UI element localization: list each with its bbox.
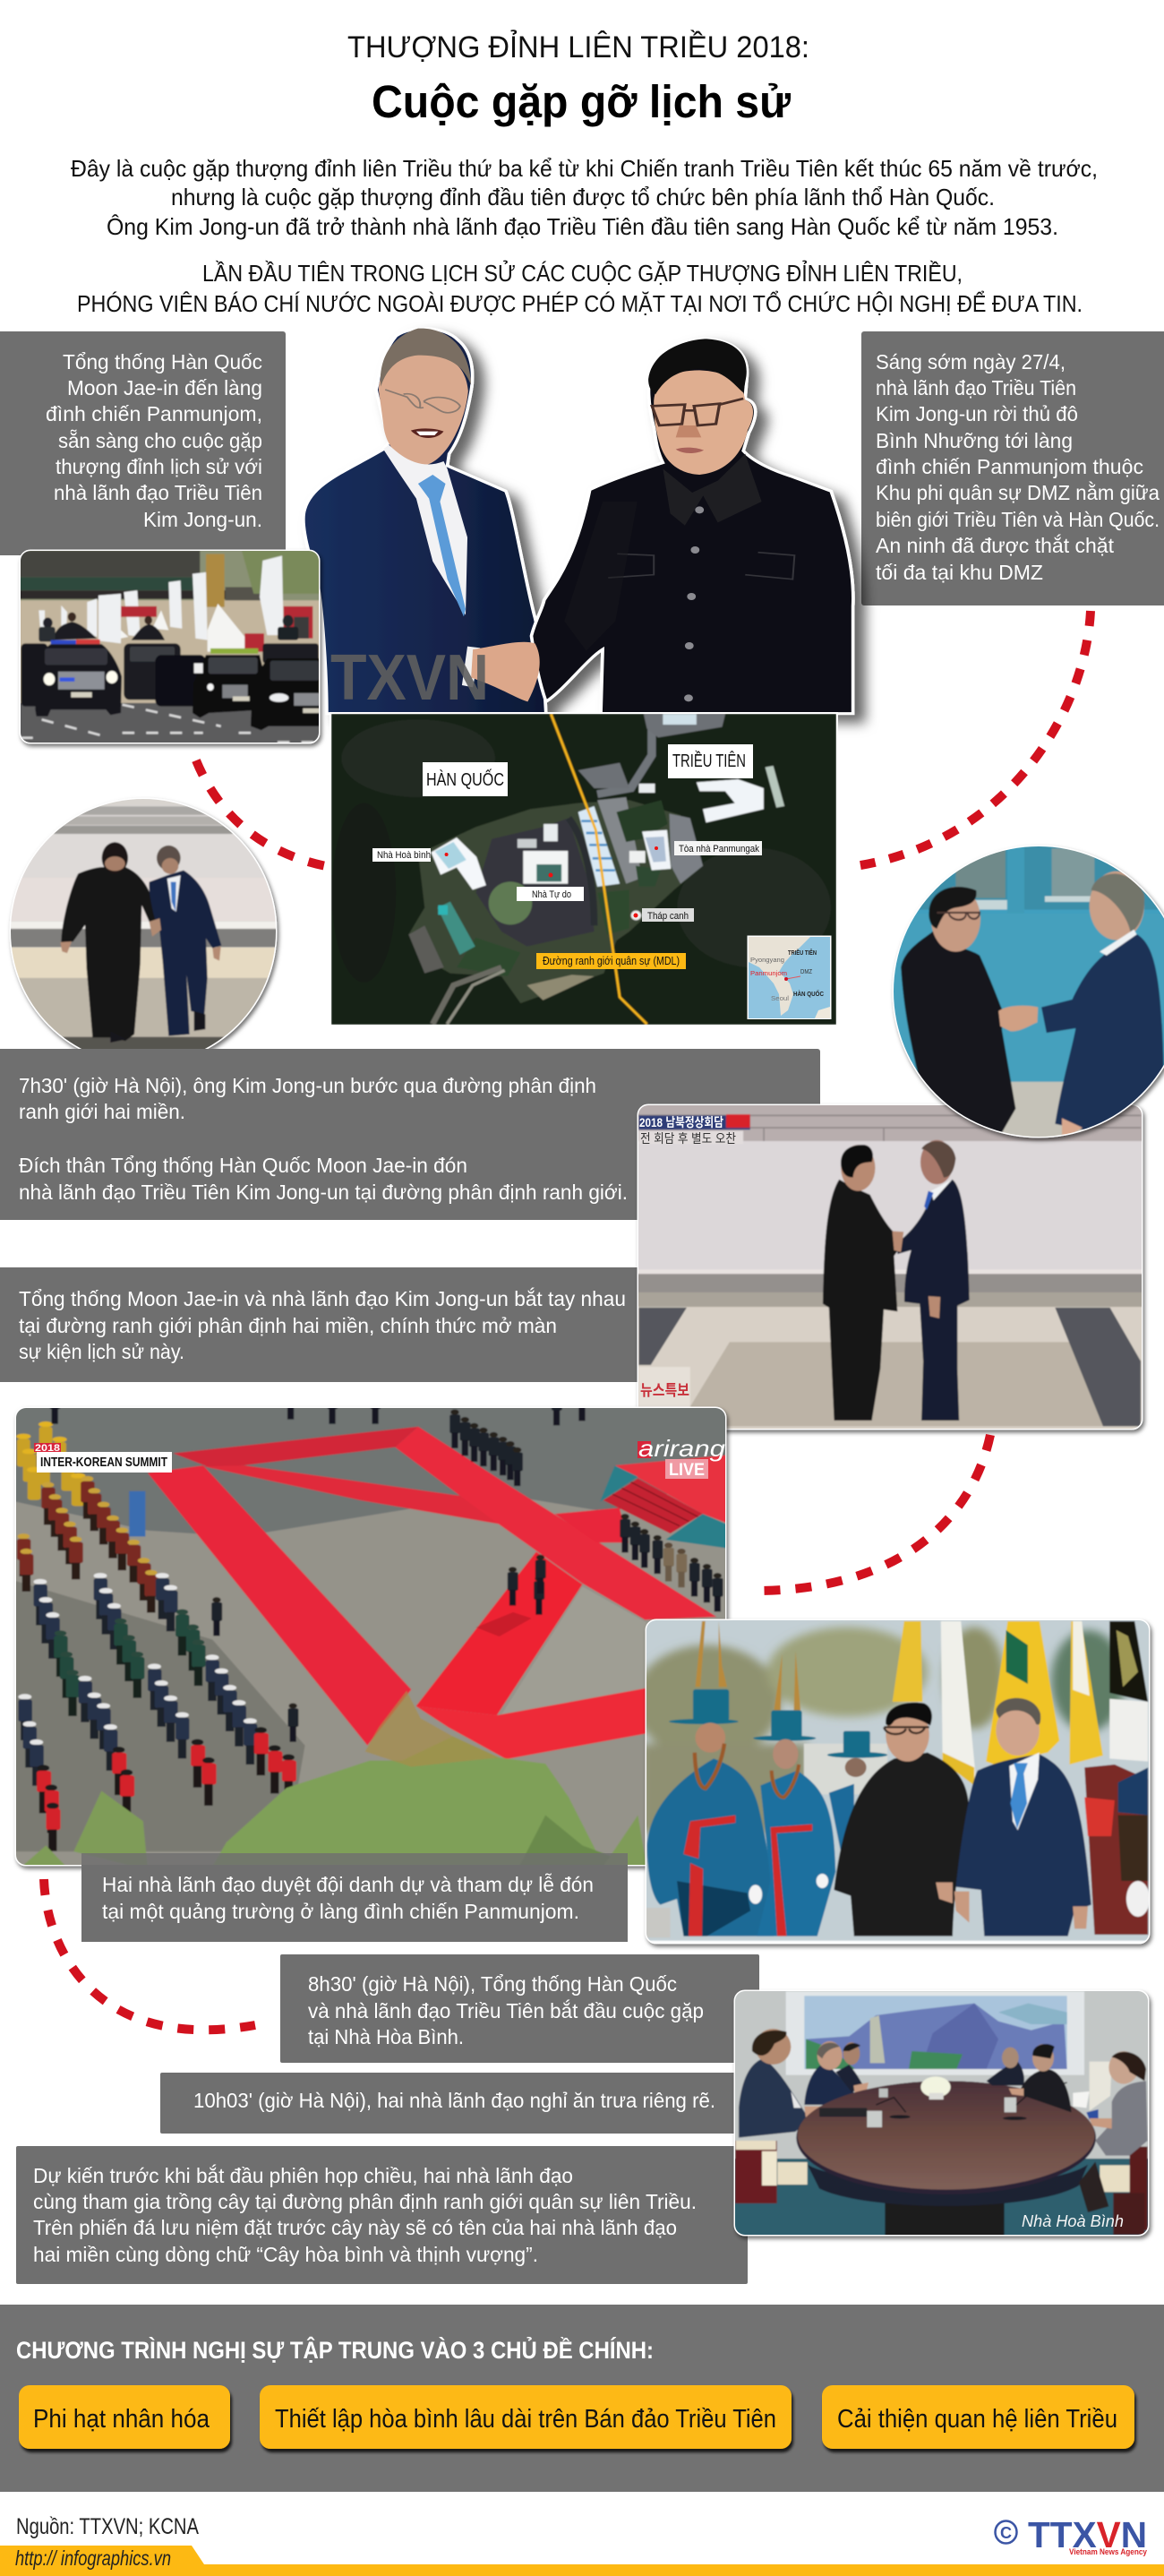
photo: handshake on the demarcation line bbox=[637, 1103, 1144, 1432]
map label: Nhà Tự do: Nhà Tự do bbox=[532, 889, 571, 900]
photo: leaders cutout handshake bbox=[304, 329, 853, 714]
panel: Kim Jong-un departure text: Bình Nhưỡng tới làng bbox=[876, 429, 1073, 452]
dashed arrow: motorcade to crossing bbox=[196, 760, 326, 866]
Moon shirt and tie bbox=[383, 445, 467, 615]
map label: MDL line: Đường ranh giới quân sự (MDL) bbox=[543, 954, 680, 967]
photo: Peace House meeting table bbox=[732, 1988, 1151, 2239]
panel: 8h30 talks text: 8h30' (giờ Hà Nội), Tổng thống Hàn Quốc bbox=[308, 1972, 677, 1996]
panel: Moon Jae-in arrival text: thượng đỉnh lịch sử với bbox=[56, 455, 262, 478]
Arirang logo: arirang bbox=[638, 1435, 726, 1462]
Moon figure bbox=[149, 871, 221, 1036]
Moon face bbox=[379, 354, 468, 465]
panel: handshake text: sự kiện lịch sử này. bbox=[19, 1340, 184, 1363]
soft tree backdrop bbox=[634, 1627, 1125, 1833]
panel: handshake text: Tổng thống Moon Jae-in và nhà lãnh đạo Kim Jong-un bắt tay nhau bbox=[19, 1287, 626, 1310]
panel: 7h30 crossing text: 7h30' (giờ Hà Nội), ông Kim Jong-un bước qua đường phân định bbox=[19, 1074, 596, 1097]
table top bbox=[796, 2081, 1096, 2194]
agenda button: inter-Korean relations bbox=[822, 2385, 1134, 2449]
inset locator map: HÀN QUỐC bbox=[793, 989, 824, 998]
TV bug text: 뉴스특보 bbox=[640, 1382, 689, 1399]
Kim face bbox=[654, 370, 753, 475]
footer yellow band with URL tab bbox=[0, 2546, 1164, 2576]
Kim collar and buttons bbox=[663, 454, 762, 526]
map label: Nhà Hoà bình: Nhà Hoà bình bbox=[377, 850, 431, 861]
inset locator map: DMZ bbox=[800, 969, 813, 975]
map label: Panmungak: Tòa nhà Panmungak bbox=[679, 844, 759, 854]
right delegates bbox=[987, 2062, 1024, 2085]
panel: handshake text: tại đường ranh giới phân định hai miền, chính thức mở màn bbox=[19, 1314, 557, 1337]
inset locator map: Pyongyang bbox=[750, 957, 784, 964]
broadcast badge: 2018: 2018 bbox=[35, 1443, 60, 1454]
panel: Moon Jae-in arrival text bbox=[0, 331, 286, 555]
left delegates bbox=[739, 2058, 806, 2138]
agenda button: inter-Korean relations: Cải thiện quan hệ liên Triều bbox=[837, 2405, 1117, 2434]
back cars bbox=[21, 643, 47, 707]
panel: Moon Jae-in arrival text: Kim Jong-un. bbox=[143, 508, 262, 531]
logo: TTXVN: TTXVN bbox=[1028, 2514, 1147, 2555]
panel: 7h30 crossing text: ranh giới hai miền. bbox=[19, 1100, 185, 1123]
map label: Hàn Quốc bbox=[423, 762, 508, 796]
road bbox=[18, 703, 322, 746]
table base bbox=[885, 2201, 1005, 2237]
flags bbox=[893, 1621, 922, 1702]
panel: Kim Jong-un departure text: Sáng sớm ngày 27/4, bbox=[876, 350, 1066, 374]
agenda button: lasting peace bbox=[260, 2385, 792, 2449]
dashed arrow: handshake to ceremony bbox=[755, 1435, 990, 1591]
map label: Tháp canh bbox=[634, 908, 694, 922]
guard 2 bbox=[774, 1651, 800, 1711]
panel: Kim Jong-un departure text: Khu phi quân sự DMZ nằm giữa bbox=[876, 481, 1160, 504]
panel: Kim Jong-un departure text bbox=[861, 331, 1164, 605]
panel: Moon Jae-in arrival text: Tổng thống Hàn Quốc bbox=[63, 350, 262, 374]
standing security bbox=[52, 622, 165, 640]
panel: Kim Jong-un departure text: tối đa tại khu DMZ bbox=[876, 561, 1043, 584]
map label: Nhà Hoà bình bbox=[372, 848, 449, 862]
panel: 7h30 crossing text bbox=[0, 1049, 820, 1220]
panel: 8h30 talks text: và nhà lãnh đạo Triều Tiên bắt đầu cuộc gặp bbox=[308, 1999, 704, 2022]
dashed arrow: ceremony to peace house bbox=[44, 1879, 255, 2030]
top-left TV ticker bbox=[638, 1115, 750, 1129]
map label: Hàn Quốc: HÀN QUỐC bbox=[426, 769, 504, 790]
dashed arrow: DMZ to handshake bbox=[849, 611, 1091, 867]
Moon figure bbox=[897, 1180, 970, 1421]
Kim figure bbox=[901, 931, 1015, 1139]
two leaders walking bbox=[508, 1567, 518, 1606]
photo caption: Nhà Hoà Bình: Nhà Hoà Bình bbox=[1022, 2212, 1124, 2230]
panel: 8h30 talks text bbox=[280, 1954, 759, 2063]
hands bbox=[998, 1006, 1038, 1031]
chairs bbox=[735, 2141, 777, 2203]
map label: Nhà Tự do bbox=[517, 872, 584, 901]
Kim figure bbox=[823, 1180, 901, 1421]
front SUV bbox=[35, 644, 122, 717]
tree bbox=[212, 1737, 605, 1869]
map label: Panmungak bbox=[655, 841, 762, 855]
inset locator map: Seoul bbox=[771, 996, 789, 1002]
source note: Nguồn: TTXVN; KCNA bbox=[16, 2514, 199, 2539]
panel: tree planting text: Dự kiến trước khi bắt đầu phiên họp chiều, hai nhà lãnh đạo bbox=[33, 2164, 573, 2187]
TV subtitle text: 전 회담 후 별도 오찬 bbox=[640, 1131, 736, 1146]
bottom-left TV bug bbox=[639, 1367, 690, 1406]
panel: Kim Jong-un departure text: An ninh đã được thắt chặt bbox=[876, 534, 1115, 557]
TV ticker text: 2018 남북정상회담 bbox=[639, 1115, 723, 1129]
watermark: TXVN bbox=[330, 642, 489, 714]
panel: ceremony caption: tại một quảng trường ở làng đình chiến Panmunjom. bbox=[102, 1900, 579, 1923]
panel: handshake text bbox=[0, 1267, 648, 1382]
map label: Tháp canh: Tháp canh bbox=[647, 911, 689, 922]
map label: Triều Tiên bbox=[668, 744, 753, 778]
Kim figure bbox=[61, 867, 161, 1041]
photo: handshake against blue wall (circle) bbox=[887, 841, 1164, 1151]
Moon bbox=[956, 1754, 1091, 1936]
panel: 7h30 crossing text: nhà lãnh đạo Triều Tiên Kim Jong-un tại đường phân định ranh giới. bbox=[19, 1181, 628, 1204]
photo: honour guard with leaders bbox=[634, 1619, 1155, 1943]
panel: 10h03 lunch text bbox=[160, 2073, 742, 2134]
photo: honour guard and red carpet bbox=[9, 1380, 731, 1869]
intro paragraph: nhưng là cuộc gặp thượng đỉnh đầu tiên được tổ chức bên phía lãnh thổ Hàn Quốc. bbox=[171, 184, 995, 210]
panel: Kim Jong-un departure text: nhà lãnh đạo Triều Tiên bbox=[876, 376, 1076, 399]
title line: summit name: THƯỢNG ĐỈNH LIÊN TRIỀU 2018: bbox=[347, 30, 809, 64]
panel: Moon Jae-in arrival text: nhà lãnh đạo Triều Tiên bbox=[54, 481, 262, 504]
live badge: LIVE bbox=[669, 1461, 705, 1480]
inset locator map bbox=[747, 935, 831, 1019]
panel: Moon Jae-in arrival text: đình chiến Panmunjom, bbox=[46, 402, 262, 425]
agenda button: denuclearization bbox=[19, 2385, 230, 2449]
panel: Kim Jong-un departure text: đình chiến Panmunjom thuộc bbox=[876, 455, 1143, 478]
panel: tree planting text: hai miền cùng dòng chữ “Cây hòa bình và thịnh vượng”. bbox=[33, 2243, 538, 2266]
agenda button: denuclearization: Phi hạt nhân hóa bbox=[33, 2405, 210, 2434]
limousines bbox=[193, 655, 266, 718]
carpet bands bbox=[148, 1465, 411, 1746]
guard 3 bbox=[829, 1784, 854, 1851]
panel: Moon Jae-in arrival text: Moon Jae-in đến làng bbox=[67, 376, 262, 399]
panel: 7h30 crossing text: Đích thân Tổng thống Hàn Quốc Moon Jae-in đón bbox=[19, 1154, 467, 1177]
intro paragraph bbox=[71, 155, 1098, 240]
photo: motorcade bbox=[18, 547, 322, 746]
inset locator map: Panmunjom bbox=[750, 971, 787, 977]
right side guards bbox=[1084, 1765, 1148, 1935]
guard 1 bbox=[696, 1621, 727, 1687]
band soldiers bbox=[38, 1421, 54, 1443]
panel: agenda band bbox=[0, 2305, 1164, 2492]
footer yellow band with URL tab: http:// infographics.vn bbox=[15, 2546, 171, 2570]
agenda heading: CHƯƠNG TRÌNH NGHỊ SỰ TẬP TRUNG VÀO 3 CHỦ ĐỀ CHÍNH: bbox=[16, 2335, 654, 2364]
agenda button: lasting peace: Thiết lập hòa bình lâu dài trên Bán đảo Triều Tiên bbox=[275, 2405, 776, 2434]
main title: Cuộc gặp gỡ lịch sử bbox=[372, 76, 791, 127]
banners bbox=[39, 555, 284, 643]
uppercase highlight statement: LẦN ĐẦU TIÊN TRONG LỊCH SỬ CÁC CUỘC GẶP THƯỢNG ĐỈNH LIÊN TRIỀU, bbox=[202, 259, 963, 287]
pavilion stairs bbox=[615, 1455, 731, 1524]
map label: Triều Tiên: TRIỀU TIÊN bbox=[672, 751, 746, 771]
background officials bbox=[49, 1408, 61, 1425]
photo: leaders crossing line (circle) bbox=[9, 795, 280, 1064]
panel: ceremony caption: Hai nhà lãnh đạo duyệt đội danh dự và tham dự lễ đón bbox=[102, 1873, 594, 1896]
photo: satellite map of Panmunjom bbox=[330, 712, 838, 1026]
panel: ceremony caption bbox=[81, 1853, 628, 1942]
clasped hands bbox=[462, 647, 480, 687]
Moon figure bbox=[1041, 934, 1164, 1146]
panel: tree planting text: cùng tham gia trồng cây tại đường phân định ranh giới quân sự liên Triều. bbox=[33, 2190, 697, 2213]
panel: 8h30 talks text: tại Nhà Hòa Bình. bbox=[308, 2025, 464, 2048]
logo: TTXVN: Vietnam News Agency bbox=[1069, 2547, 1147, 2556]
panel: Moon Jae-in arrival text: sẵn sàng cho cuộc gặp bbox=[58, 428, 262, 452]
broadcast badge: Inter-Korean Summit: INTER-KOREAN SUMMIT bbox=[40, 1455, 167, 1470]
Kim bbox=[834, 1753, 970, 1936]
intro paragraph: Ông Kim Jong-un đã trở thành nhà lãnh đạo Triều Tiên đầu tiên sang Hàn Quốc kể từ năm 1953. bbox=[107, 213, 1058, 240]
uppercase highlight statement bbox=[77, 259, 1083, 317]
logo: TTXVN: C bbox=[1000, 2524, 1012, 2542]
broadcast badge: Inter-Korean Summit bbox=[37, 1452, 172, 1473]
panel: tree planting text bbox=[16, 2146, 748, 2284]
panel: 10h03 lunch text: 10h03' (giờ Hà Nội), hai nhà lãnh đạo nghỉ ăn trưa riêng rẽ. bbox=[193, 2089, 715, 2112]
panel: tree planting text: Trên phiến đá lưu niệm đặt trước cây này sẽ có tên của hai nhà lãnh đạo bbox=[33, 2216, 677, 2239]
intro paragraph: Đây là cuộc gặp thượng đỉnh liên Triều thứ ba kể từ khi Chiến tranh Triều Tiên kết thúc 65 năm về trước, bbox=[71, 155, 1098, 182]
TV time: 09:30 bbox=[641, 1413, 674, 1427]
panel: Kim Jong-un departure text: Kim Jong-un rời thủ đô bbox=[876, 402, 1078, 425]
inset locator map: TRIỀU TIÊN bbox=[788, 948, 817, 957]
